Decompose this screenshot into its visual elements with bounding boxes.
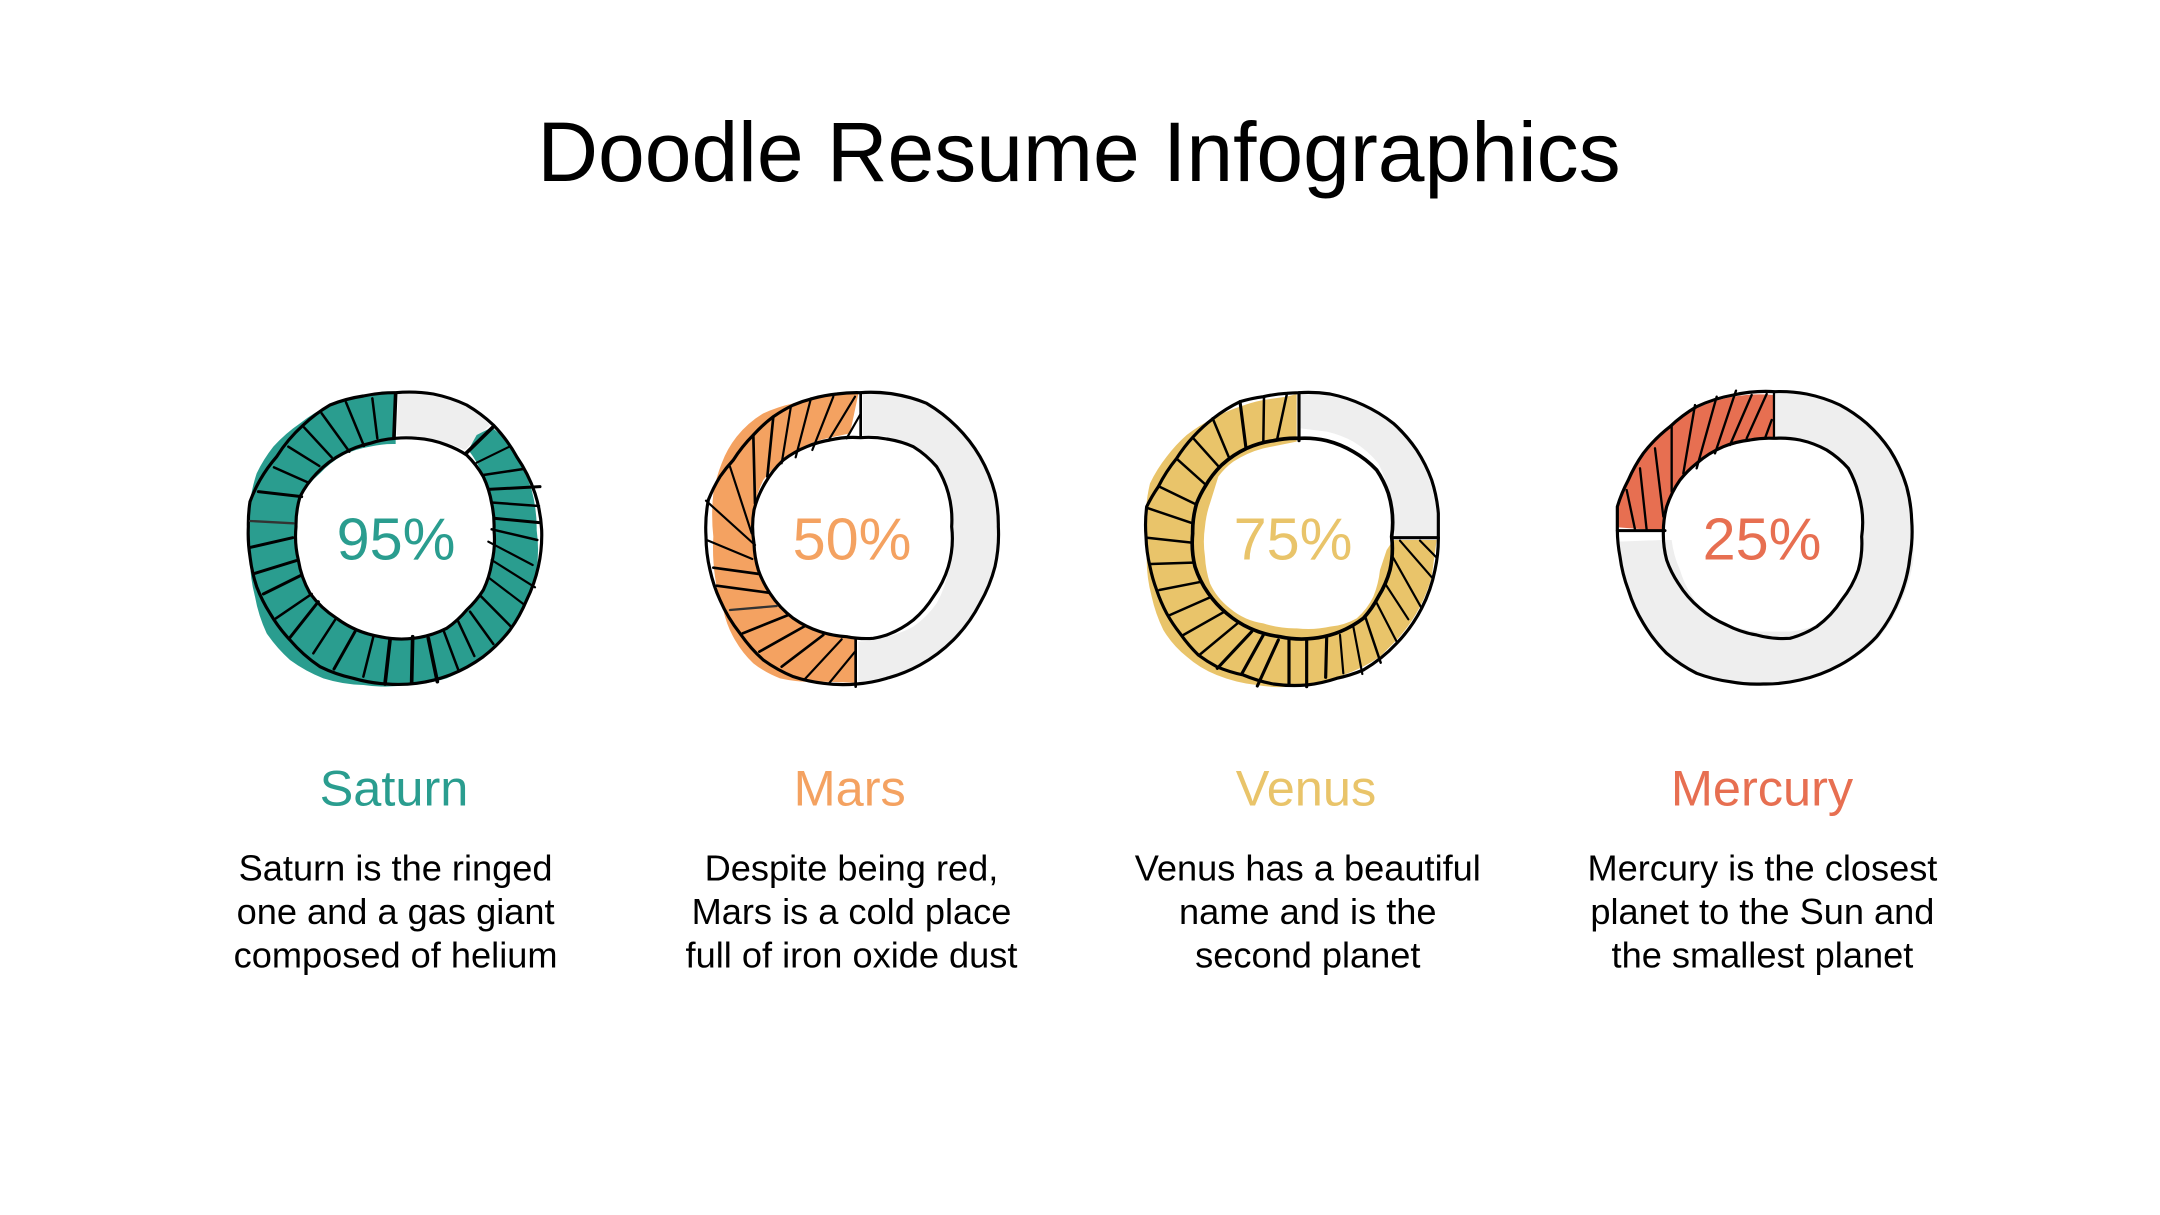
heading: Saturn: Saturn (320, 760, 468, 816)
donut chart: Saturn 95% (248, 392, 542, 687)
heading: Venus: Venus (1236, 760, 1376, 816)
percentage: 95%: 95% (337, 506, 455, 572)
description: Venus: Venus has a beautiful (1135, 848, 1481, 888)
description: Mercury: planet to the Sun and (1590, 891, 1934, 932)
percentage: 50%: 50% (793, 506, 911, 572)
panel: Mars (686, 392, 1017, 975)
description: Mars: full of iron oxide dust (686, 934, 1017, 976)
heading: Mercury: Mercury (1671, 760, 1854, 816)
description: Saturn: composed of helium (234, 934, 558, 976)
percentage: 75%: 75% (1234, 506, 1352, 572)
description: Venus: second planet (1195, 934, 1420, 976)
panel: Mercury (1587, 391, 1937, 975)
title: Doodle Resume Infographics (537, 105, 1621, 199)
donut chart: Mercury 25% (1617, 391, 1914, 685)
description: Mars: Despite being red, (705, 848, 998, 888)
donut chart: Mars 50% (706, 392, 999, 687)
panel: Venus (1135, 392, 1481, 976)
percentage: 25%: 25% (1703, 506, 1821, 572)
description: Saturn: Saturn is the ringed (239, 848, 553, 888)
donut chart: Venus 75% (1145, 392, 1438, 687)
description: Venus: name and is the (1179, 891, 1437, 932)
description: Saturn: one and a gas giant (237, 891, 555, 932)
heading: Mars: Mars (794, 760, 906, 816)
description: Mercury: Mercury is the closest (1587, 848, 1937, 888)
description: Mercury: the smallest planet (1612, 934, 1913, 976)
panel: Saturn (234, 392, 558, 975)
description: Mars: Mars is a cold place (692, 891, 1011, 932)
